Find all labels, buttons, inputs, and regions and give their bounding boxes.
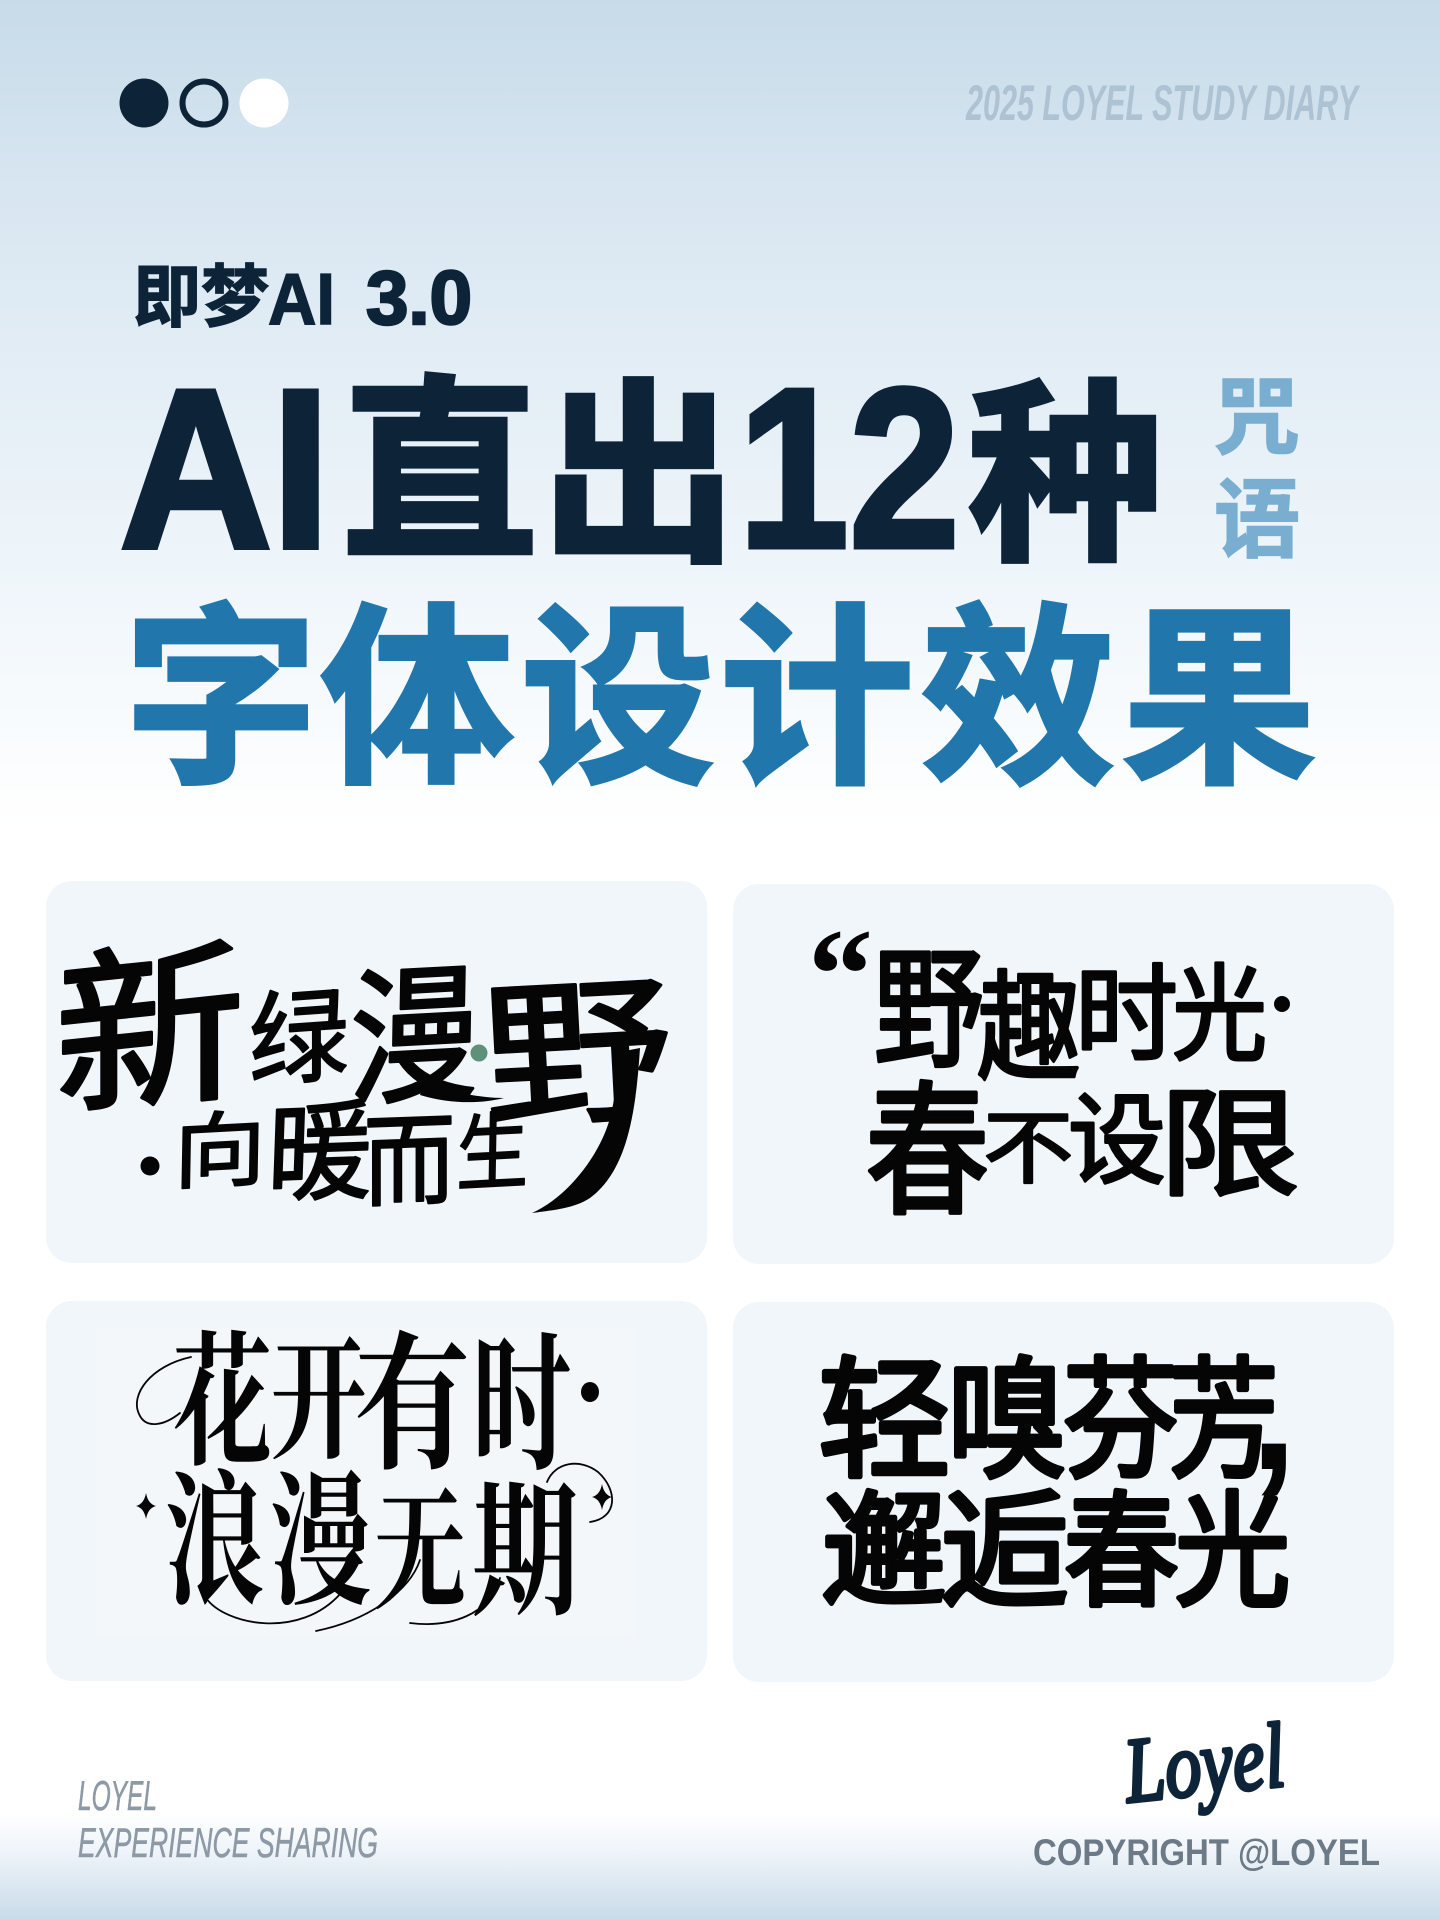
line 1: 花开有时: 有 — [355, 1286, 471, 1500]
line 2: 春不设限 — [865, 1035, 1300, 1244]
footer left text — [78, 1772, 378, 1866]
title line 2: 字体设计效果 — [124, 592, 1316, 809]
title line 1: AI — [120, 342, 330, 595]
title line 1: 直 — [342, 364, 538, 583]
line 1: 野趣时光: 野 — [874, 904, 984, 1094]
subtitle: 3.0 — [366, 256, 472, 341]
line 2: 浪漫无期: 期 — [472, 1437, 579, 1645]
line 2: 春不设限: 限 — [1159, 1050, 1300, 1220]
line 2: 浪漫无期 — [165, 1425, 579, 1645]
opening quote mark: “ — [808, 903, 873, 1047]
line 2: 向暖而生: 而 — [363, 1079, 455, 1227]
line 2: 邂逅春光: 光 — [1175, 1450, 1291, 1632]
title line 1: 12 — [738, 342, 960, 596]
logo: Loyel script: Loyel — [1118, 1704, 1289, 1822]
title line 1 — [120, 342, 1163, 596]
line 1: 新绿漫: 绿 — [249, 954, 349, 1108]
line 1: 轻嗅芬芳 — [818, 1314, 1279, 1506]
title line 1: 种 — [968, 368, 1163, 586]
comma: , — [1250, 1316, 1297, 1506]
line 1: 新绿漫 — [54, 879, 504, 1154]
panel: brush style lettering — [46, 879, 707, 1263]
subtitle: 即梦 — [133, 260, 269, 336]
line 1: 轻嗅芬芳: 芬 — [1063, 1314, 1179, 1505]
line 2: 向暖而生: 生 — [456, 1083, 530, 1209]
line 2: 向暖而生: 暖 — [265, 1063, 375, 1224]
line 2: 向暖而生: 向 — [173, 1083, 267, 1207]
line 1: 野趣时光 — [874, 904, 1290, 1105]
middle dot — [581, 1382, 599, 1402]
vertical word: 咒语: 语 — [1214, 473, 1300, 569]
footer left text: LOYEL — [78, 1772, 157, 1819]
accent dot — [470, 1044, 488, 1062]
icon: sparkles — [136, 1484, 612, 1519]
copyright: COPYRIGHT @LOYEL — [1033, 1832, 1380, 1873]
vertical word: 咒语: 咒 — [1214, 370, 1300, 466]
line 2: 浪漫无期: 浪 — [165, 1425, 264, 1634]
line 1: 新绿漫: 漫 — [348, 915, 481, 1136]
line 1: 轻嗅芬芳: 嗅 — [947, 1314, 1066, 1506]
decorative swashes — [137, 1357, 612, 1631]
line 1: 新绿漫: 新 — [54, 879, 245, 1154]
line 2: 邂逅春光: 邂 — [821, 1450, 946, 1631]
line 2: 邂逅春光: 春 — [1064, 1450, 1180, 1632]
line 2: 春不设限: 春 — [865, 1035, 989, 1244]
line 1: 花开有时: 花 — [173, 1286, 272, 1495]
line 2: 邂逅春光 — [821, 1450, 1291, 1632]
line 1: 轻嗅芬芳: 芳 — [1169, 1314, 1279, 1505]
character: 野 with brush tail: 野 — [476, 922, 678, 1160]
title line 1: 出 — [541, 368, 737, 587]
line 1: 野趣时光: 趣 — [977, 932, 1081, 1105]
icon: three header dots — [120, 78, 288, 128]
line 2: 浪漫无期: 无 — [373, 1448, 466, 1636]
line 1: 野趣时光: 光 — [1172, 930, 1267, 1082]
subtitle: AI — [268, 260, 335, 340]
line 2: 春不设限: 不 — [983, 1083, 1073, 1200]
line 2: 向暖而生 — [140, 1063, 530, 1227]
line 1: 轻嗅芬芳: 轻 — [818, 1314, 951, 1506]
line 1: 花开有时: 开 — [270, 1294, 367, 1487]
line 1: 花开有时: 时 — [472, 1286, 571, 1500]
line 2: 春不设限: 设 — [1068, 1061, 1166, 1204]
subtitle — [133, 256, 472, 341]
line 2: 邂逅春光: 逅 — [941, 1451, 1068, 1632]
footer left text: EXPERIENCE SHARING — [78, 1819, 378, 1866]
vertical word: 咒语 — [1214, 370, 1300, 569]
panel: rounded brush lettering — [733, 884, 1394, 1264]
panel: elegant serif lettering — [46, 1286, 707, 1681]
line 1: 野趣时光: 时 — [1075, 929, 1178, 1082]
panel: rounded heavy lettering — [733, 1302, 1394, 1682]
line 1: 花开有时 — [173, 1286, 571, 1500]
line 2: 浪漫无期: 漫 — [270, 1426, 371, 1634]
